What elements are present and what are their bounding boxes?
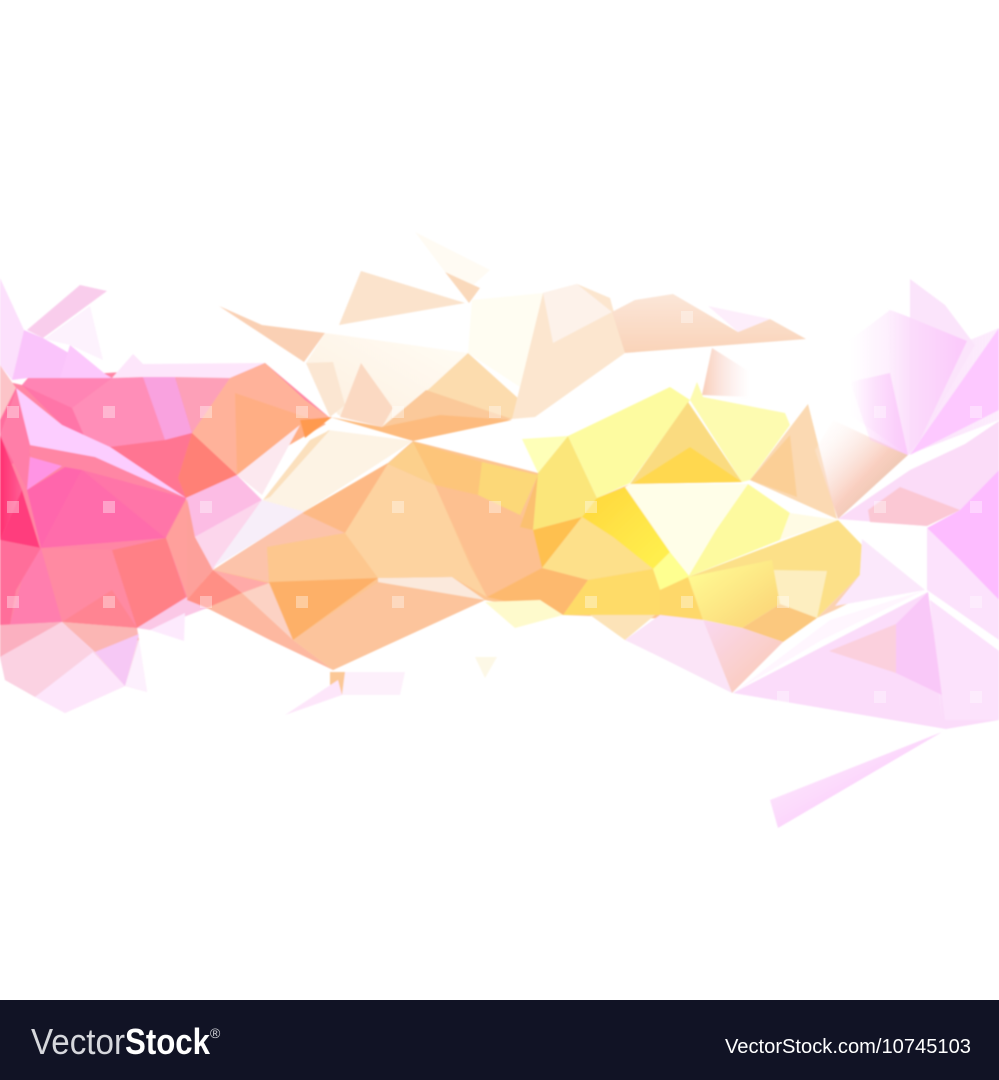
bottom lilac fan (733, 592, 999, 729)
upper pink and coral facets (22, 363, 332, 498)
footer bar (0, 1000, 999, 1080)
hot pink and red left edge (0, 388, 62, 548)
shard: top-left peach wing (219, 306, 325, 362)
lilac band (838, 421, 999, 526)
panel: yellow facets centre (487, 382, 790, 615)
pink underlay (0, 363, 330, 628)
pale underlay (0, 625, 147, 713)
bridge facets between pink and orange (186, 425, 333, 670)
orange underlay (187, 441, 703, 670)
footer bar: Stock (125, 1021, 211, 1062)
shard: small fading wedge (702, 348, 750, 397)
top faded lilac (850, 310, 999, 455)
shard: right beige block (512, 284, 625, 419)
lavender sliver (16, 388, 186, 498)
saturated magenta (927, 470, 999, 600)
panel: cream shards left of centre (263, 430, 413, 528)
panel: pale upper orange shards (219, 232, 806, 441)
white sliver (733, 590, 925, 693)
central magenta facets (27, 467, 186, 548)
panel: lilac facets on the right (733, 279, 999, 828)
bottom pale pink facets (0, 622, 147, 713)
panel: yellow and cream facets right of centre (625, 484, 925, 642)
watermark squares (7, 311, 982, 703)
lower coral facets (0, 498, 207, 641)
shard: top right wing (612, 294, 806, 353)
image id: VectorStock.com/10745103 (725, 1036, 971, 1058)
panel: pink polygon cluster on the left (0, 278, 332, 713)
panel: orange facets centre (186, 425, 703, 670)
shard: top peach triangle (339, 271, 465, 325)
shard: cream centre (306, 333, 468, 427)
top-left pale shards (0, 278, 265, 420)
panel: lower pale shards (285, 600, 783, 715)
stray lilac shard (770, 732, 942, 828)
shard: faint tip (415, 232, 490, 288)
artwork: low-poly band (0, 232, 999, 828)
logo: VectorStock: Vector (31, 1021, 125, 1062)
panel: tan facets (750, 404, 908, 519)
orange strip (330, 415, 512, 441)
footer bar: ® (210, 1025, 221, 1041)
